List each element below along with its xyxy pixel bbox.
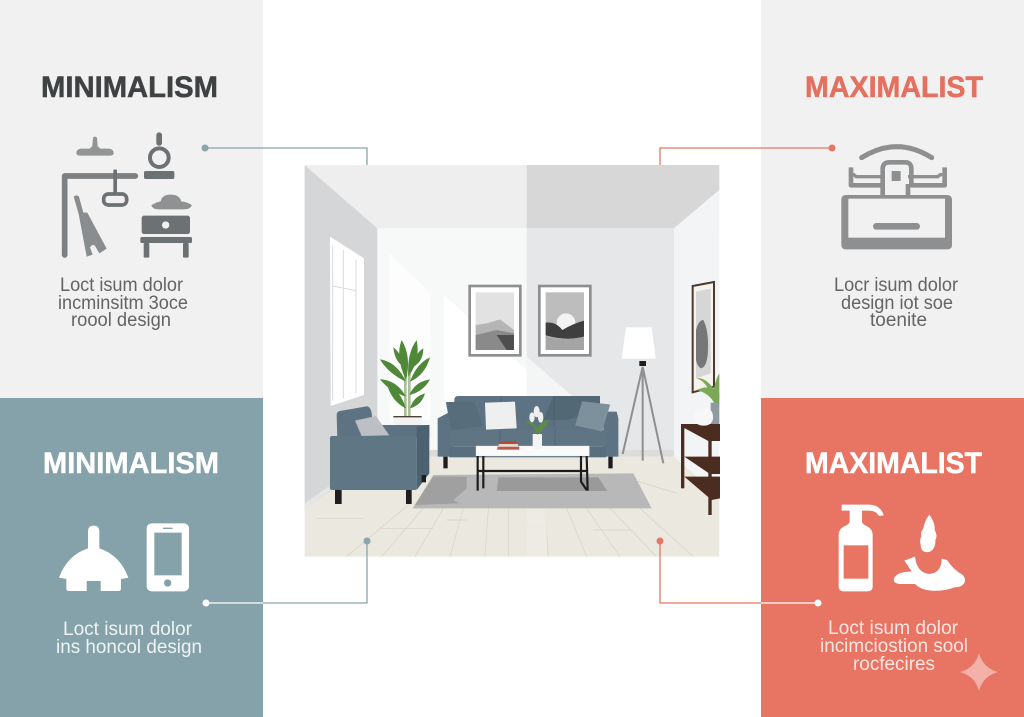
connector: maximalist bottom to room	[656, 538, 822, 606]
heading: maximalist white: MAXIMALIST	[805, 447, 982, 480]
text: maximalist bottom description: rocfecires	[853, 654, 935, 675]
icon: telephone	[841, 147, 952, 249]
text: minimalism bottom description: ins honcol design	[56, 637, 202, 658]
text: maximalist bottom description	[820, 618, 968, 675]
rug	[413, 473, 652, 508]
text: maximalist top description	[834, 275, 959, 331]
plant	[380, 340, 430, 425]
icon: furniture set	[65, 132, 192, 258]
coffee table	[476, 446, 589, 491]
text: minimalism bottom description: Loct isum dolor	[63, 619, 193, 640]
text: minimalism top description: Loct isum dolor	[60, 275, 184, 296]
books	[497, 441, 519, 450]
floor	[305, 450, 719, 557]
icon: sparkle	[960, 653, 998, 691]
panel: maximalist bottom	[761, 398, 1024, 717]
heading: maximalist: MAXIMALIST	[805, 71, 983, 104]
side plant and vase	[694, 373, 719, 426]
connector: minimalism top to room	[202, 144, 367, 165]
flower vase	[525, 406, 549, 449]
panel: maximalist top	[761, 0, 1024, 398]
heading: minimalism: MINIMALISM	[41, 71, 218, 104]
text: minimalism top description: roool design	[71, 310, 171, 331]
text: maximalist top description: design iot soe	[841, 293, 953, 314]
sofa	[438, 396, 618, 468]
text: maximalist top description: toenite	[870, 310, 927, 331]
wall picture	[693, 282, 714, 392]
room illustration	[305, 165, 720, 557]
floor lamp	[622, 327, 663, 463]
icon: duster	[59, 526, 128, 591]
icon: pump bottle	[839, 505, 884, 591]
text: minimalism top description	[58, 275, 188, 331]
window	[330, 237, 364, 406]
icon: smartphone	[147, 523, 189, 591]
left wall	[305, 165, 377, 510]
icon: flame on hand	[894, 515, 965, 591]
text: minimalism top description: incminsitm 3oce	[58, 293, 188, 314]
back wall	[377, 228, 674, 457]
framed art: mountains	[470, 286, 520, 355]
framed art: sun	[539, 286, 590, 355]
text: maximalist bottom description: Loct isum dolor	[828, 618, 959, 639]
text: maximalist bottom description: incimciostion sool	[820, 636, 968, 657]
heading: minimalism white: MINIMALISM	[43, 447, 219, 480]
right wall	[674, 190, 719, 500]
panel: minimalism bottom	[0, 398, 263, 717]
connector: maximalist top to room	[660, 144, 836, 165]
text: maximalist top description: Locr isum dolor	[834, 275, 959, 296]
connector: minimalism bottom to room	[202, 538, 370, 606]
text: minimalism bottom description	[56, 619, 202, 658]
ceiling	[305, 165, 719, 228]
panel: minimalism top	[0, 0, 263, 398]
console table	[681, 424, 720, 515]
armchair	[330, 406, 429, 504]
